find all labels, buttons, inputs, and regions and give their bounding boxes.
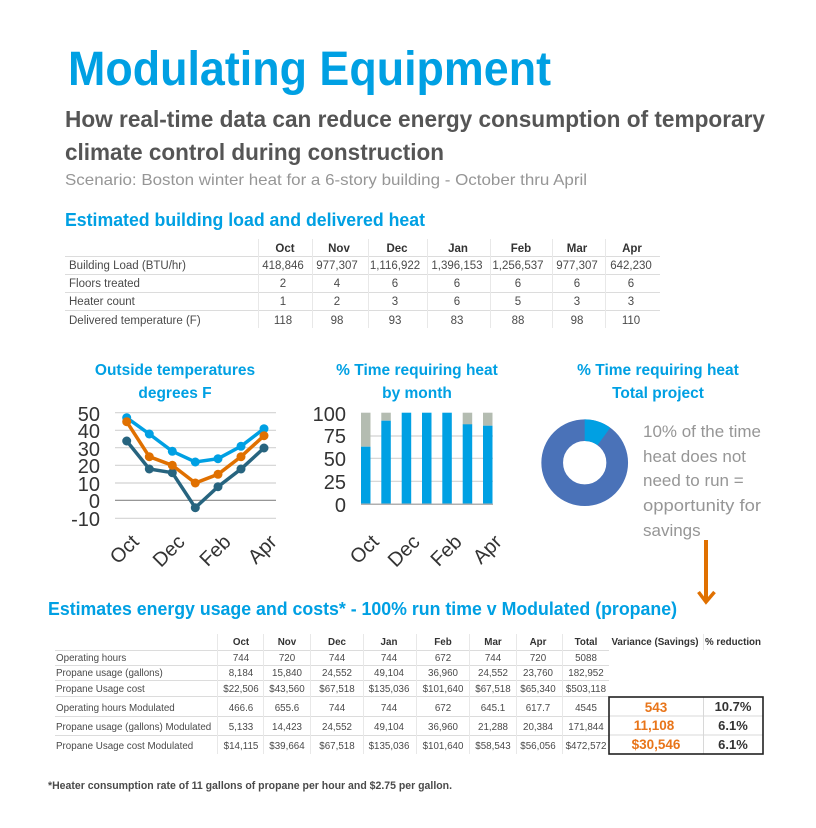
title: Modulating Equipment <box>68 43 551 96</box>
table: energy usage and costs: Propane usage (gallons) Modulated <box>56 722 211 733</box>
line chart: outside temperatures: 10 <box>78 474 100 496</box>
chart title: by month <box>336 362 498 402</box>
stacked bar chart: time requiring heat by month: Apr <box>469 531 507 569</box>
table: energy usage and costs: 49,104 <box>374 722 405 733</box>
table: building load and delivered heat: Floors treated <box>69 278 140 290</box>
table: building load and delivered heat: 88 <box>512 315 524 327</box>
table: energy usage and costs: Mar <box>484 637 502 648</box>
table: building load and delivered heat: 418,846 <box>262 260 304 272</box>
table: building load and delivered heat: Mar <box>567 243 588 255</box>
table: energy usage and costs: $101,640 <box>423 741 464 752</box>
line chart: outside temperatures: 20 <box>78 456 100 478</box>
table: energy usage and costs: $472,572 <box>566 741 606 752</box>
line chart: outside temperatures: 50 <box>78 404 100 426</box>
table: energy usage and costs: Operating hours <box>56 653 126 664</box>
line chart: outside temperatures: Oct <box>106 531 144 569</box>
callout: savings summary box: 11,108 <box>634 718 675 733</box>
table: energy usage and costs: 24,552 <box>478 668 508 679</box>
table: energy usage and costs: Jan <box>381 637 397 648</box>
scenario text: Scenario: Boston winter heat for a 6-story building - October thru April <box>65 172 587 189</box>
table: energy usage and costs: 744 <box>381 653 398 664</box>
table: building load and delivered heat: 642,230 <box>610 260 652 272</box>
line chart: outside temperatures: -10 <box>71 509 100 531</box>
callout: savings summary box: 10.7% <box>715 699 752 714</box>
stacked bar chart: time requiring heat by month: Dec <box>384 531 425 572</box>
table: energy usage and costs: 49,104 <box>374 668 405 679</box>
subtitle: climate control during construction <box>65 139 444 165</box>
line chart: outside temperatures: 0 <box>89 491 100 513</box>
donut chart: total project <box>552 419 617 495</box>
table: energy usage and costs: 672 <box>435 653 451 664</box>
stacked bar chart: time requiring heat by month: 50 <box>324 449 346 471</box>
line chart: outside temperatures: 40 <box>78 421 100 443</box>
line chart: outside temperatures: Dec <box>149 531 190 572</box>
table: building load and delivered heat: 98 <box>331 315 343 327</box>
table: energy usage and costs: 645.1 <box>481 703 505 714</box>
table: building load and delivered heat: Apr <box>622 243 642 255</box>
table: building load and delivered heat: 118 <box>274 315 292 327</box>
table: energy usage and costs: $67,518 <box>319 741 355 752</box>
table: energy usage and costs: 744 <box>233 653 250 664</box>
callout: savings summary box <box>609 697 763 754</box>
chart title: total project <box>577 362 739 402</box>
table: energy usage and costs: % reduction <box>705 637 761 648</box>
line chart: outside temperatures <box>71 404 282 572</box>
table: energy usage and costs: 20,384 <box>523 722 554 733</box>
table: energy usage and costs <box>55 634 761 754</box>
arrow: down to savings table <box>698 540 714 602</box>
table: energy usage and costs: 720 <box>530 653 547 664</box>
panel: outside temperatures <box>71 362 282 572</box>
table: energy usage and costs: 14,423 <box>272 722 303 733</box>
stacked bar chart: time requiring heat by month: 0 <box>335 495 346 517</box>
table: energy usage and costs: 36,960 <box>428 722 459 733</box>
table: building load and delivered heat: 6 <box>392 278 398 290</box>
table: building load and delivered heat: 6 <box>454 278 460 290</box>
table: energy usage and costs: Propane usage (gallons) <box>56 668 163 679</box>
table: building load and delivered heat: 6 <box>574 278 580 290</box>
table: energy usage and costs: $58,543 <box>475 741 511 752</box>
stacked bar chart: time requiring heat by month <box>313 404 507 572</box>
table: energy usage and costs: 5,133 <box>229 722 254 733</box>
table: building load and delivered heat: 6 <box>515 278 521 290</box>
table: energy usage and costs: Propane Usage cost <box>56 684 145 695</box>
table: building load and delivered heat: 3 <box>574 296 580 308</box>
chart title: outside temperatures: Outside temperatures <box>95 362 255 379</box>
table: energy usage and costs: 182,952 <box>568 668 604 679</box>
table: building load and delivered heat: 2 <box>280 278 286 290</box>
table: building load and delivered heat: Feb <box>511 243 531 255</box>
panel: time requiring heat total project <box>552 362 761 540</box>
chart title: outside temperatures <box>95 362 255 402</box>
callout: savings summary box: $30,546 <box>632 737 681 752</box>
table: building load and delivered heat: Nov <box>328 243 350 255</box>
table: building load and delivered heat: 977,307 <box>556 260 598 272</box>
callout: savings opportunity: need to run = <box>643 471 744 490</box>
callout: savings opportunity: 10% of the time <box>643 422 761 441</box>
panel: time requiring heat by month <box>313 362 507 572</box>
table: building load and delivered heat: 2 <box>334 296 340 308</box>
table: energy usage and costs: $135,036 <box>369 684 410 695</box>
callout: savings summary box: 6.1% <box>718 737 748 752</box>
table: energy usage and costs: $56,056 <box>520 741 556 752</box>
table: building load and delivered heat: 1,256,537 <box>492 260 544 272</box>
table: building load and delivered heat: 3 <box>628 296 634 308</box>
callout: savings opportunity <box>643 422 761 540</box>
table: energy usage and costs: 744 <box>329 703 346 714</box>
table: energy usage and costs: 4545 <box>575 703 597 714</box>
table: energy usage and costs: Variance (Savings) <box>611 637 699 648</box>
table: energy usage and costs: 24,552 <box>322 668 352 679</box>
table: energy usage and costs: 744 <box>485 653 502 664</box>
callout: savings opportunity: heat does not <box>643 447 746 466</box>
stacked bar chart: time requiring heat by month: Oct <box>346 531 384 569</box>
table: energy usage and costs: $101,640 <box>423 684 464 695</box>
stacked bar chart: time requiring heat by month: 25 <box>324 472 346 494</box>
callout: savings opportunity: savings <box>643 521 701 540</box>
callout: savings opportunity: opportunity for <box>643 496 761 515</box>
table: energy usage and costs: 15,840 <box>272 668 303 679</box>
table: building load and delivered heat: Building Load (BTU/hr) <box>69 260 186 272</box>
table: energy usage and costs: 21,288 <box>478 722 509 733</box>
table: energy usage and costs: Feb <box>434 637 452 648</box>
table: building load and delivered heat: 3 <box>392 296 398 308</box>
table: energy usage and costs: 36,960 <box>428 668 459 679</box>
table: energy usage and costs: 466.6 <box>229 703 254 714</box>
table: energy usage and costs: $22,506 <box>223 684 259 695</box>
table: energy usage and costs: 171,844 <box>568 722 604 733</box>
table: building load and delivered heat: Delivered temperature (F) <box>69 315 201 327</box>
callout: savings summary box: 543 <box>645 700 668 715</box>
table: building load and delivered heat: 5 <box>515 296 521 308</box>
table: energy usage and costs: $135,036 <box>369 741 410 752</box>
table: energy usage and costs: $39,664 <box>269 741 305 752</box>
table: building load and delivered heat: Heater count <box>69 296 136 308</box>
table: building load and delivered heat: 1 <box>280 296 286 308</box>
chart title: by month: % Time requiring heat <box>336 362 498 379</box>
chart title: by month: by month <box>382 385 452 402</box>
stacked bar chart: time requiring heat by month: 100 <box>313 404 346 426</box>
line chart: outside temperatures: 30 <box>78 439 100 461</box>
table: energy usage and costs: Propane Usage cost Modulated <box>56 741 193 752</box>
chart title: total project: Total project <box>612 385 704 402</box>
heading: energy usage and costs: Estimates energy usage and costs* - 100% run time v Modulated (propane) <box>48 599 677 619</box>
footnote: *Heater consumption rate of 11 gallons of propane per hour and $2.75 per gallon. <box>48 780 452 792</box>
table: energy usage and costs: 617.7 <box>526 703 550 714</box>
stacked bar chart: time requiring heat by month: Feb <box>427 531 467 571</box>
table: building load and delivered heat: Dec <box>386 243 408 255</box>
table: energy usage and costs: $67,518 <box>319 684 355 695</box>
subtitle <box>65 106 765 165</box>
table: energy usage and costs: 720 <box>279 653 296 664</box>
line chart: outside temperatures: Apr <box>244 531 282 569</box>
table: energy usage and costs: 744 <box>329 653 346 664</box>
table: energy usage and costs: $65,340 <box>520 684 556 695</box>
table: energy usage and costs: Operating hours Modulated <box>56 703 175 714</box>
table: building load and delivered heat: 83 <box>451 315 463 327</box>
table: energy usage and costs: Apr <box>530 637 547 648</box>
chart title: total project: % Time requiring heat <box>577 362 739 379</box>
table: building load and delivered heat: 6 <box>454 296 460 308</box>
table: building load and delivered heat: 110 <box>622 315 640 327</box>
callout: savings summary box: 6.1% <box>718 718 748 733</box>
table: energy usage and costs: 5088 <box>575 653 597 664</box>
table: energy usage and costs: $67,518 <box>475 684 511 695</box>
table: energy usage and costs: $503,118 <box>566 684 607 695</box>
table: energy usage and costs: 24,552 <box>322 722 352 733</box>
table: energy usage and costs: 23,760 <box>523 668 554 679</box>
line chart: outside temperatures: Feb <box>196 531 236 571</box>
table: energy usage and costs: Dec <box>328 637 347 648</box>
stacked bar chart: time requiring heat by month: 75 <box>324 426 346 448</box>
chart title: outside temperatures: degrees F <box>138 385 212 402</box>
table: energy usage and costs: Nov <box>278 637 297 648</box>
table: building load and delivered heat: 93 <box>389 315 401 327</box>
table: energy usage and costs: 672 <box>435 703 451 714</box>
table: building load and delivered heat: 4 <box>334 278 341 290</box>
table: energy usage and costs: 655.6 <box>275 703 300 714</box>
table: building load and delivered heat: 98 <box>571 315 583 327</box>
table: energy usage and costs: Oct <box>233 637 250 648</box>
table: building load and delivered heat: 1,116,922 <box>370 260 420 272</box>
table: energy usage and costs: 744 <box>381 703 398 714</box>
table: building load and delivered heat <box>65 239 660 328</box>
table: building load and delivered heat: 1,396,153 <box>431 260 483 272</box>
table: energy usage and costs: $14,115 <box>224 741 259 752</box>
table: energy usage and costs: 8,184 <box>229 668 254 679</box>
table: building load and delivered heat: Jan <box>448 243 468 255</box>
table: building load and delivered heat: Oct <box>275 243 295 255</box>
table: building load and delivered heat: 6 <box>628 278 634 290</box>
subtitle: How real-time data can reduce energy consumption of temporary <box>65 106 765 132</box>
table: energy usage and costs: Total <box>575 637 598 648</box>
heading: building load table: Estimated building load and delivered heat <box>65 210 425 230</box>
table: energy usage and costs: $43,560 <box>269 684 305 695</box>
table: building load and delivered heat: 977,307 <box>316 260 358 272</box>
